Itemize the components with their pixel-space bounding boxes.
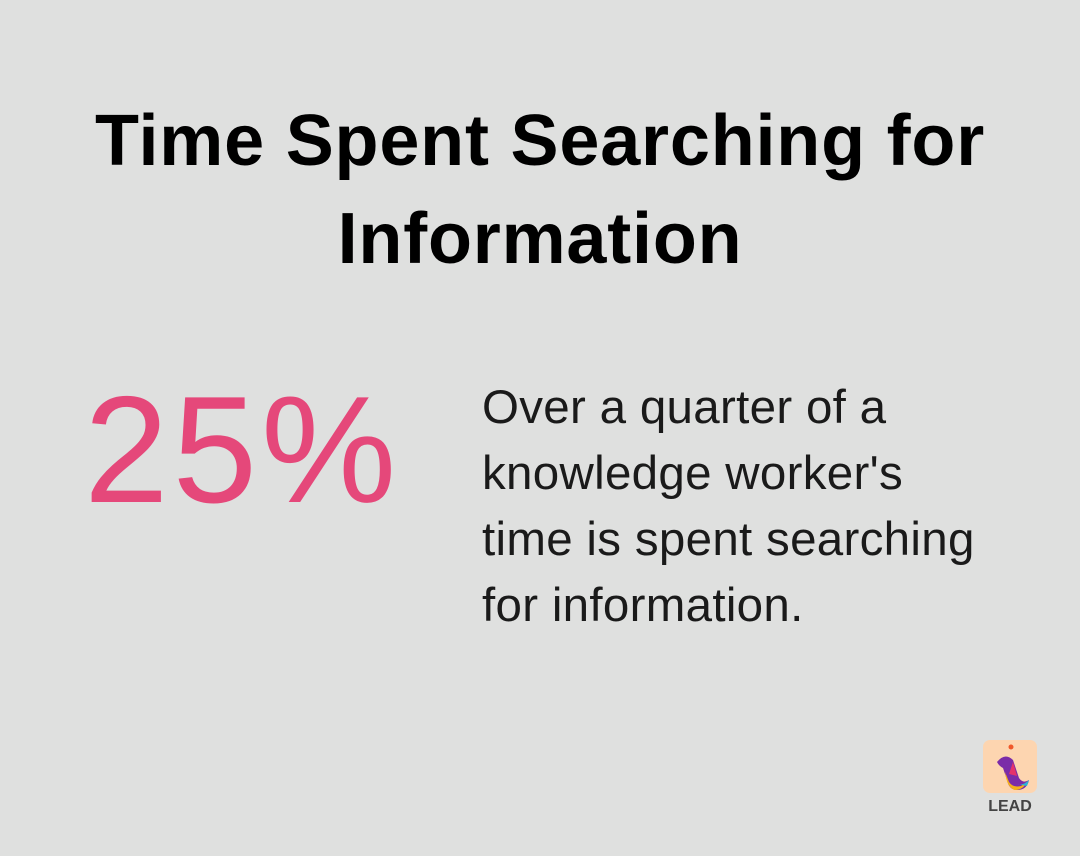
title bbox=[95, 101, 985, 279]
description text: time is spent searching bbox=[482, 513, 975, 566]
description text: for information. bbox=[482, 579, 804, 632]
logo: LEAD bbox=[988, 798, 1032, 815]
big statistic: 25% bbox=[84, 365, 400, 535]
title: Information bbox=[338, 199, 742, 279]
description text bbox=[482, 381, 975, 632]
title: Time Spent Searching for bbox=[95, 101, 985, 181]
description text: knowledge worker's bbox=[482, 447, 903, 500]
logo bbox=[983, 740, 1037, 815]
description text: Over a quarter of a bbox=[482, 381, 886, 434]
